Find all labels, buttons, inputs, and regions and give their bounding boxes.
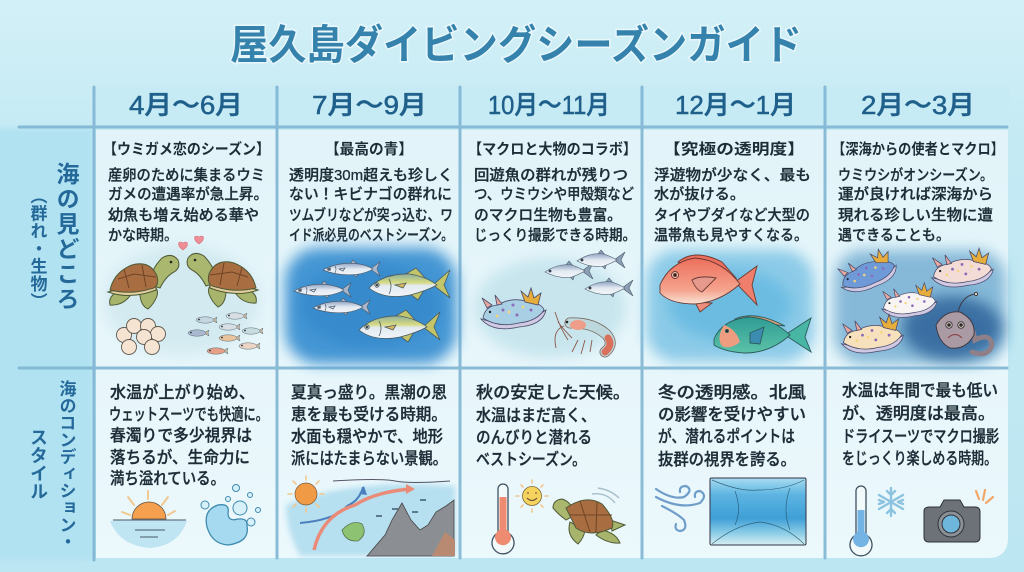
text: February to March: ウミウシがオンシーズン。 (838, 166, 993, 184)
text: April to June: 産卵のために集まるウミ (108, 167, 265, 184)
panel: December to January conditions (656, 383, 807, 545)
text: December to January: タイやブダイなど大型の (654, 206, 810, 224)
text: April to June conditions (109, 382, 268, 488)
panel: July to September conditions (286, 383, 455, 556)
text: July to September: イド派必見のベストシーズン。 (289, 226, 453, 244)
month headers: 10月〜11月 (488, 90, 610, 120)
text: July to September: ない！キビナゴの群れに (289, 185, 452, 203)
month headers: 7月〜9月 (312, 90, 427, 120)
panel: April to June highlights (103, 140, 270, 355)
text: April to June conditions: 水温が上がり始め、 (110, 382, 255, 402)
text: October to November conditions: 水温はまだ高く、 (476, 406, 596, 425)
text: December to January: 【究極の透明度】 (663, 140, 805, 158)
text: February to March conditions (842, 381, 999, 468)
text: July to September conditions: 夏真っ盛り。黒潮の恩 (291, 383, 447, 402)
text: February to March: 【深海からの使者とマクロ】 (832, 140, 1004, 158)
icon: Kuroshio current map with sun and rocks (286, 476, 455, 556)
row label: conditions and style (28, 380, 76, 550)
text: December to January conditions: が、潜れるポイントは (658, 426, 795, 446)
text: April to June: ガメの遭遇率が急上昇。 (108, 185, 268, 203)
row label: sea highlights: （群れ・生物） (28, 187, 47, 310)
icon: camera (924, 490, 993, 542)
text: April to June conditions: 落ちるが、生命力に (110, 447, 250, 467)
text: July to September: 【最高の青】 (325, 141, 413, 158)
text: December to January conditions: の影響を受けやすい (658, 405, 806, 424)
icon: clear underwater view (710, 478, 806, 545)
text: October to November conditions: のんびりと潜れる (476, 428, 592, 447)
row label: conditions and style: 海のコンディション・ (56, 380, 76, 550)
row label: sea highlights: 海の見どころ (53, 162, 80, 312)
text: April to June: 【ウミガメ恋のシーズン】 (103, 140, 270, 158)
icon: sunset over the sea (110, 491, 187, 548)
panel: February to March conditions (842, 381, 999, 556)
text: February to March: 運が良ければ深海から (838, 185, 993, 203)
text: October to November (468, 140, 637, 244)
text: July to September conditions (291, 383, 447, 468)
text: April to June: かな時期。 (108, 227, 178, 244)
icon: smiling sun (516, 480, 548, 512)
text: October to November: つ、ウミウシや甲殻類など (474, 185, 634, 203)
text: December to January conditions: 抜群の視界を誇る。 (658, 450, 796, 469)
text: October to November conditions: ベストシーズン。 (476, 449, 586, 469)
panel: season table cards (96, 130, 1008, 558)
row label: conditions and style: スタイル (28, 428, 48, 500)
text: April to June conditions: 満ち溢れている。 (110, 469, 225, 488)
text: October to November conditions: 秋の安定した天候。 (476, 383, 630, 402)
panel: July to September highlights (285, 141, 457, 364)
text: October to November: 【マクロと大物のコラボ】 (468, 140, 637, 158)
scene: blue water with sardines and yellowtail (285, 248, 457, 364)
text: April to June: 幼魚も増え始める華や (108, 206, 259, 224)
text: October to November conditions (476, 383, 630, 469)
text: February to March: 遇できることも。 (838, 227, 950, 244)
text: December to January: 温帯魚も見やすくなる。 (654, 226, 808, 244)
month headers: 2月〜3月 (861, 90, 975, 120)
icon: north wind (656, 486, 704, 531)
row label: sea highlights (28, 162, 80, 312)
table grid lines (19, 87, 1007, 560)
scene: deep sea with nudibranchs and anglerfish (834, 246, 1006, 364)
text: December to January conditions: 冬の透明感。北風 (658, 383, 807, 402)
text: December to January conditions (658, 383, 807, 469)
panel: October to November conditions (476, 383, 630, 554)
text: October to November: 回遊魚の群れが残りつ (474, 166, 628, 184)
text: February to March conditions: が、透明度は最高。 (842, 403, 995, 423)
text: December to January (654, 140, 811, 244)
text: April to June conditions: 春濁りで多少視界は (110, 426, 252, 445)
panel: row label column (0, 128, 93, 560)
icon: swimming turtle (553, 488, 625, 544)
panel: December to January highlights (646, 140, 814, 362)
text: July to September conditions: 派にはたまらない景観。 (291, 449, 447, 468)
text: February to March (832, 140, 1004, 244)
icon: warm thermometer (492, 484, 514, 554)
icon: cold thermometer (850, 486, 872, 556)
panel: April to June conditions (109, 382, 268, 548)
text: February to March conditions: 水温は年間で最も低い (842, 381, 998, 400)
panel: month header band (96, 86, 1010, 126)
scene: sea turtles, eggs and juvenile fish (104, 236, 263, 355)
panel: February to March highlights (832, 140, 1006, 364)
text: July to September conditions: 恵を最も受ける時期。 (291, 405, 447, 424)
text: October to November: のマクロ生物も豊富。 (474, 207, 622, 224)
title: 屋久島ダイビングシーズンガイド (230, 22, 802, 68)
text: July to September: ツムブリなどが突っ込む、ワ (289, 206, 453, 224)
icon: snowflake (879, 488, 903, 516)
text: July to September (289, 141, 453, 244)
text: October to November: じっくり撮影できる時期。 (474, 226, 636, 244)
panel: October to November highlights (468, 140, 637, 358)
month headers: 12月〜1月 (675, 90, 796, 120)
icon: water splash and bubbles (201, 484, 260, 545)
month headers: 4月〜6月 (129, 90, 243, 120)
text: April to June conditions: ウェットスーツでも快適に。 (109, 405, 268, 424)
text: April to June (103, 140, 270, 244)
text: February to March: 現れる珍しい生物に遭 (838, 207, 993, 224)
text: July to September conditions: 水面も穏やかで、地形 (291, 427, 443, 446)
text: December to January: 水が抜ける。 (654, 185, 745, 203)
scene: red sea bream and parrotfish (646, 250, 814, 362)
scene: tuna, nudibranch and shrimp (474, 250, 633, 358)
month headers (129, 90, 975, 120)
text: December to January: 浮遊物が少なく、最も (654, 166, 811, 184)
text: July to September: 透明度30m超えも珍しく (289, 167, 453, 184)
